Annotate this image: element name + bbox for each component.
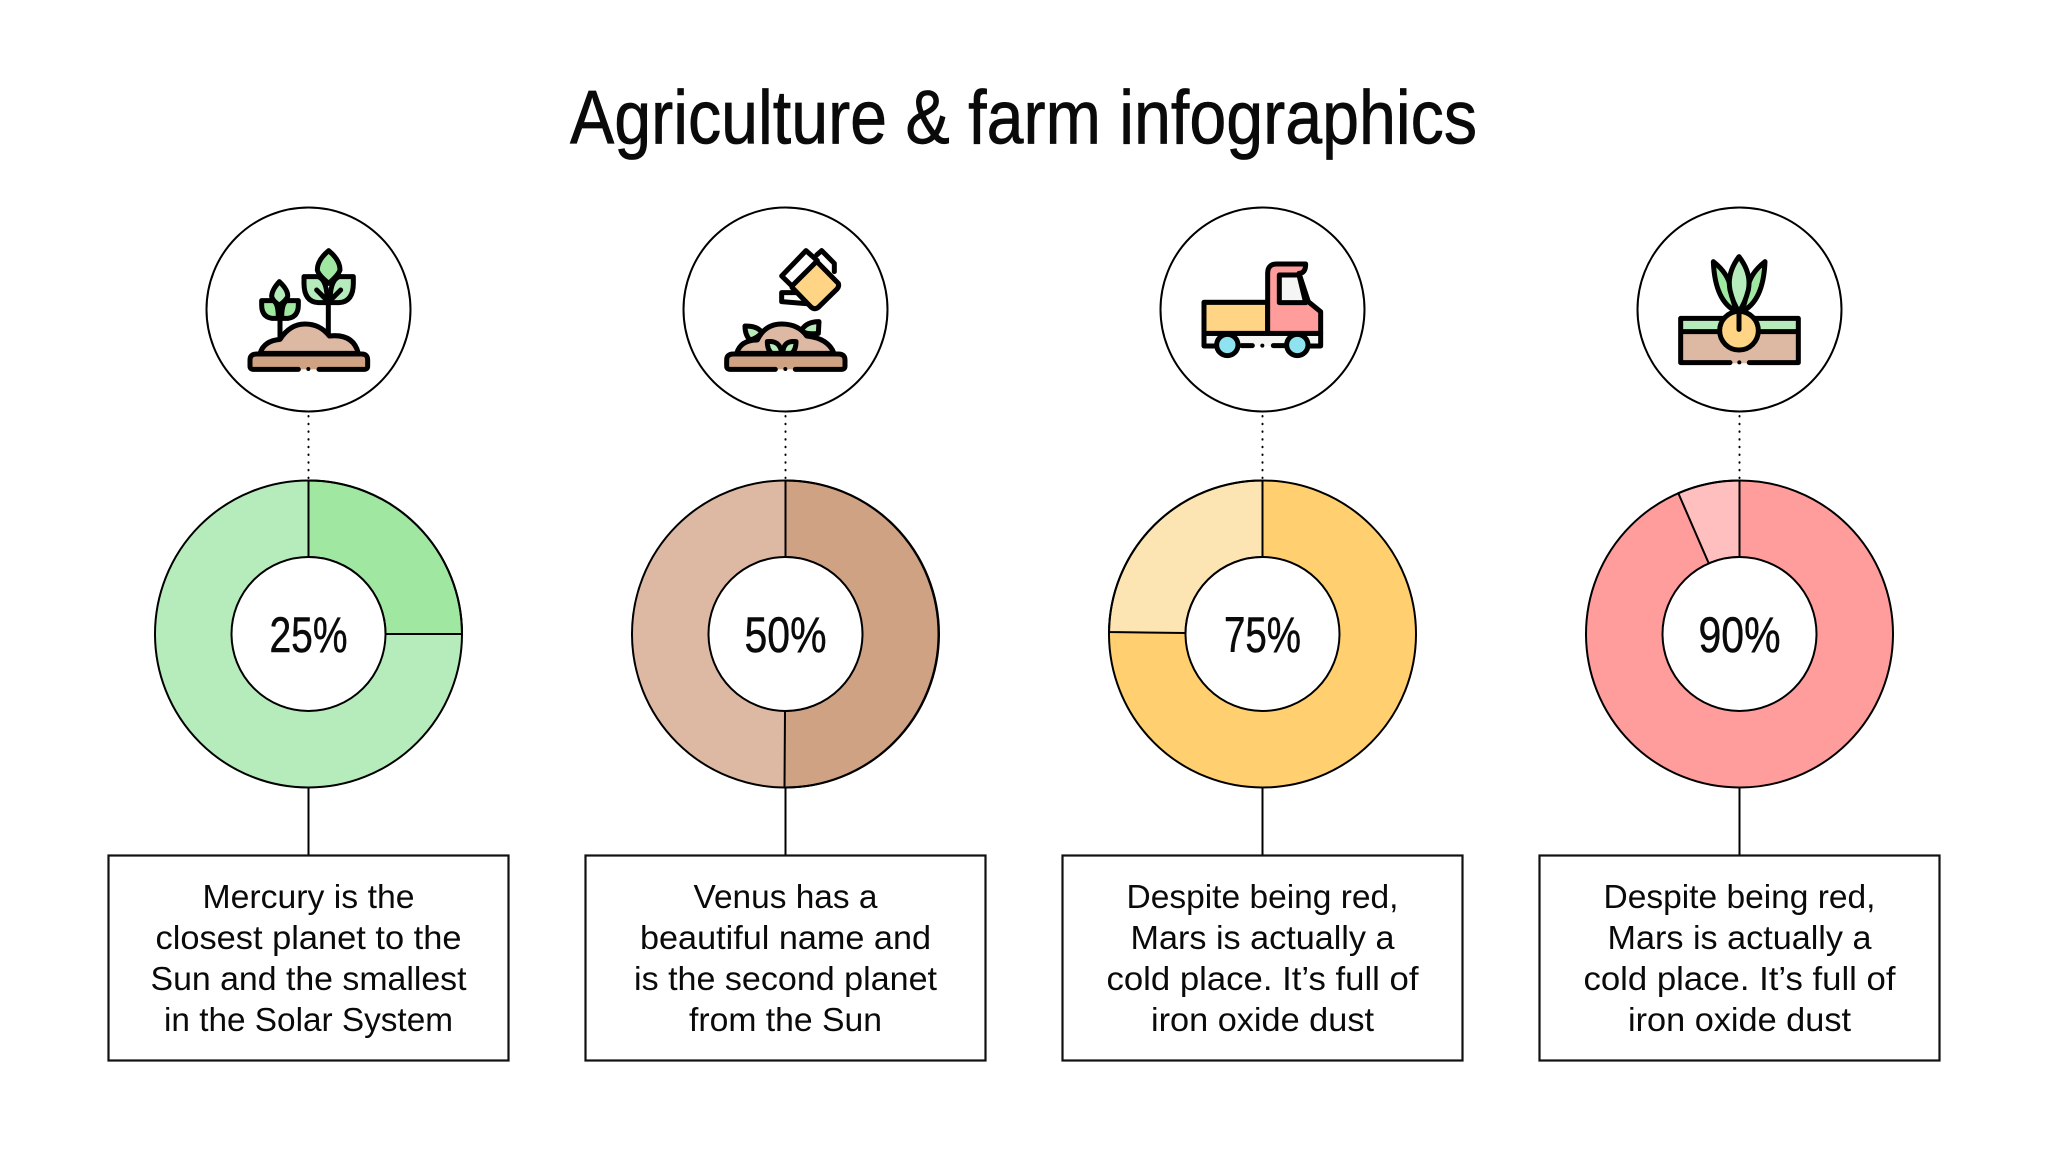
column 3: 75%: [1062, 208, 1462, 1060]
donut chart 90%: [1586, 480, 1893, 788]
text box 1: Sun and the smallest: [150, 960, 466, 997]
donut chart 90%: 90%: [1698, 607, 1780, 663]
text box 2: is the second planet: [634, 960, 937, 997]
text box 1: in the Solar System: [164, 1001, 453, 1038]
text box 2: [586, 856, 986, 1060]
text box 1: closest planet to the: [156, 919, 462, 956]
donut chart 25%: [155, 480, 462, 788]
icon circle with bulb plant: [1638, 208, 1842, 412]
column 1: 25%: [108, 208, 508, 1060]
text box 4: Mars is actually a: [1608, 919, 1872, 956]
text box 4: [1540, 856, 1940, 1060]
text box 4: iron oxide dust: [1628, 1001, 1851, 1038]
text box 4: cold place. It’s full of: [1584, 960, 1896, 997]
text box 3: iron oxide dust: [1151, 1001, 1374, 1038]
icon circle with truck: [1160, 208, 1364, 412]
text box 1: Mercury is the: [202, 878, 414, 915]
text box 2: from the Sun: [689, 1001, 882, 1038]
column 2: 50%: [586, 208, 986, 1060]
text box 2: beautiful name and: [640, 919, 931, 956]
text box 3: [1062, 856, 1462, 1060]
donut chart 25%: 25%: [270, 607, 348, 663]
text box 3: cold place. It’s full of: [1106, 960, 1419, 997]
title: Agriculture & farm infographics: [570, 76, 1477, 160]
text box 3: Despite being red,: [1126, 878, 1398, 915]
donut chart 50%: [632, 480, 939, 788]
donut chart 50%: 50%: [744, 607, 826, 663]
column 4: 90%: [1540, 208, 1940, 1060]
icon circle with sprouts: [206, 208, 410, 412]
text box 2: Venus has a: [694, 878, 878, 915]
text box 3: Mars is actually a: [1130, 919, 1395, 956]
text box 4: Despite being red,: [1604, 878, 1876, 915]
donut chart 75%: [1109, 480, 1416, 788]
text box 1: [108, 856, 508, 1060]
donut chart 75%: 75%: [1224, 607, 1301, 663]
icon circle with watering can: [684, 208, 888, 412]
